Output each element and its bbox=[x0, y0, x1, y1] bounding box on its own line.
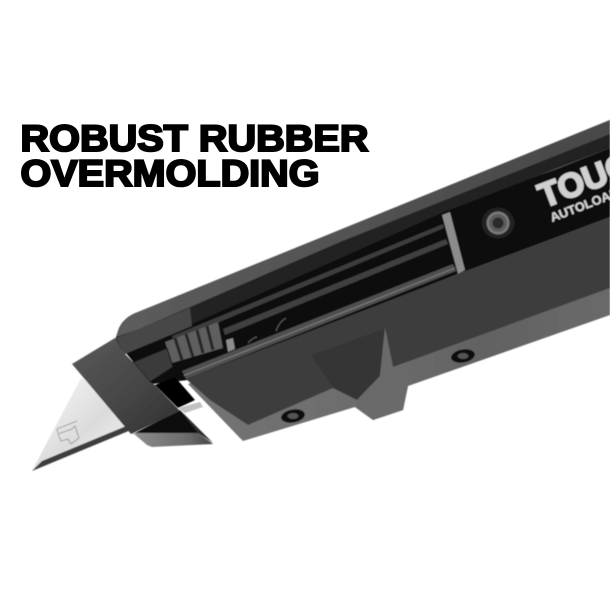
metal slide bbox=[133, 348, 173, 382]
title line 2: OVERMOLDING bbox=[20, 153, 319, 194]
body silhouette, light lip bbox=[188, 217, 610, 441]
dark upper band bbox=[186, 217, 610, 425]
thumb slider wheel bbox=[165, 322, 235, 368]
plate side facet bbox=[442, 212, 465, 274]
lower body grip bbox=[186, 217, 610, 441]
rail B bbox=[223, 239, 448, 335]
front face bbox=[72, 338, 180, 434]
body screws bbox=[280, 408, 306, 424]
blade bbox=[32, 378, 131, 471]
title line 1: ROBUST RUBBER bbox=[20, 118, 368, 159]
blade holder head bbox=[72, 338, 213, 447]
end plate with screw and logo bbox=[442, 136, 610, 274]
opening bbox=[155, 377, 195, 408]
torx screw bbox=[482, 208, 514, 238]
shiny wedge bbox=[133, 410, 199, 434]
rail A bbox=[172, 224, 444, 341]
lower plate strip bbox=[133, 433, 213, 447]
tool: utility knife bbox=[32, 120, 610, 471]
upper rubber overmold bbox=[115, 120, 610, 354]
title bbox=[20, 118, 368, 194]
stem bbox=[310, 328, 385, 400]
channel with rails bbox=[125, 150, 610, 384]
light rail bbox=[182, 264, 456, 379]
